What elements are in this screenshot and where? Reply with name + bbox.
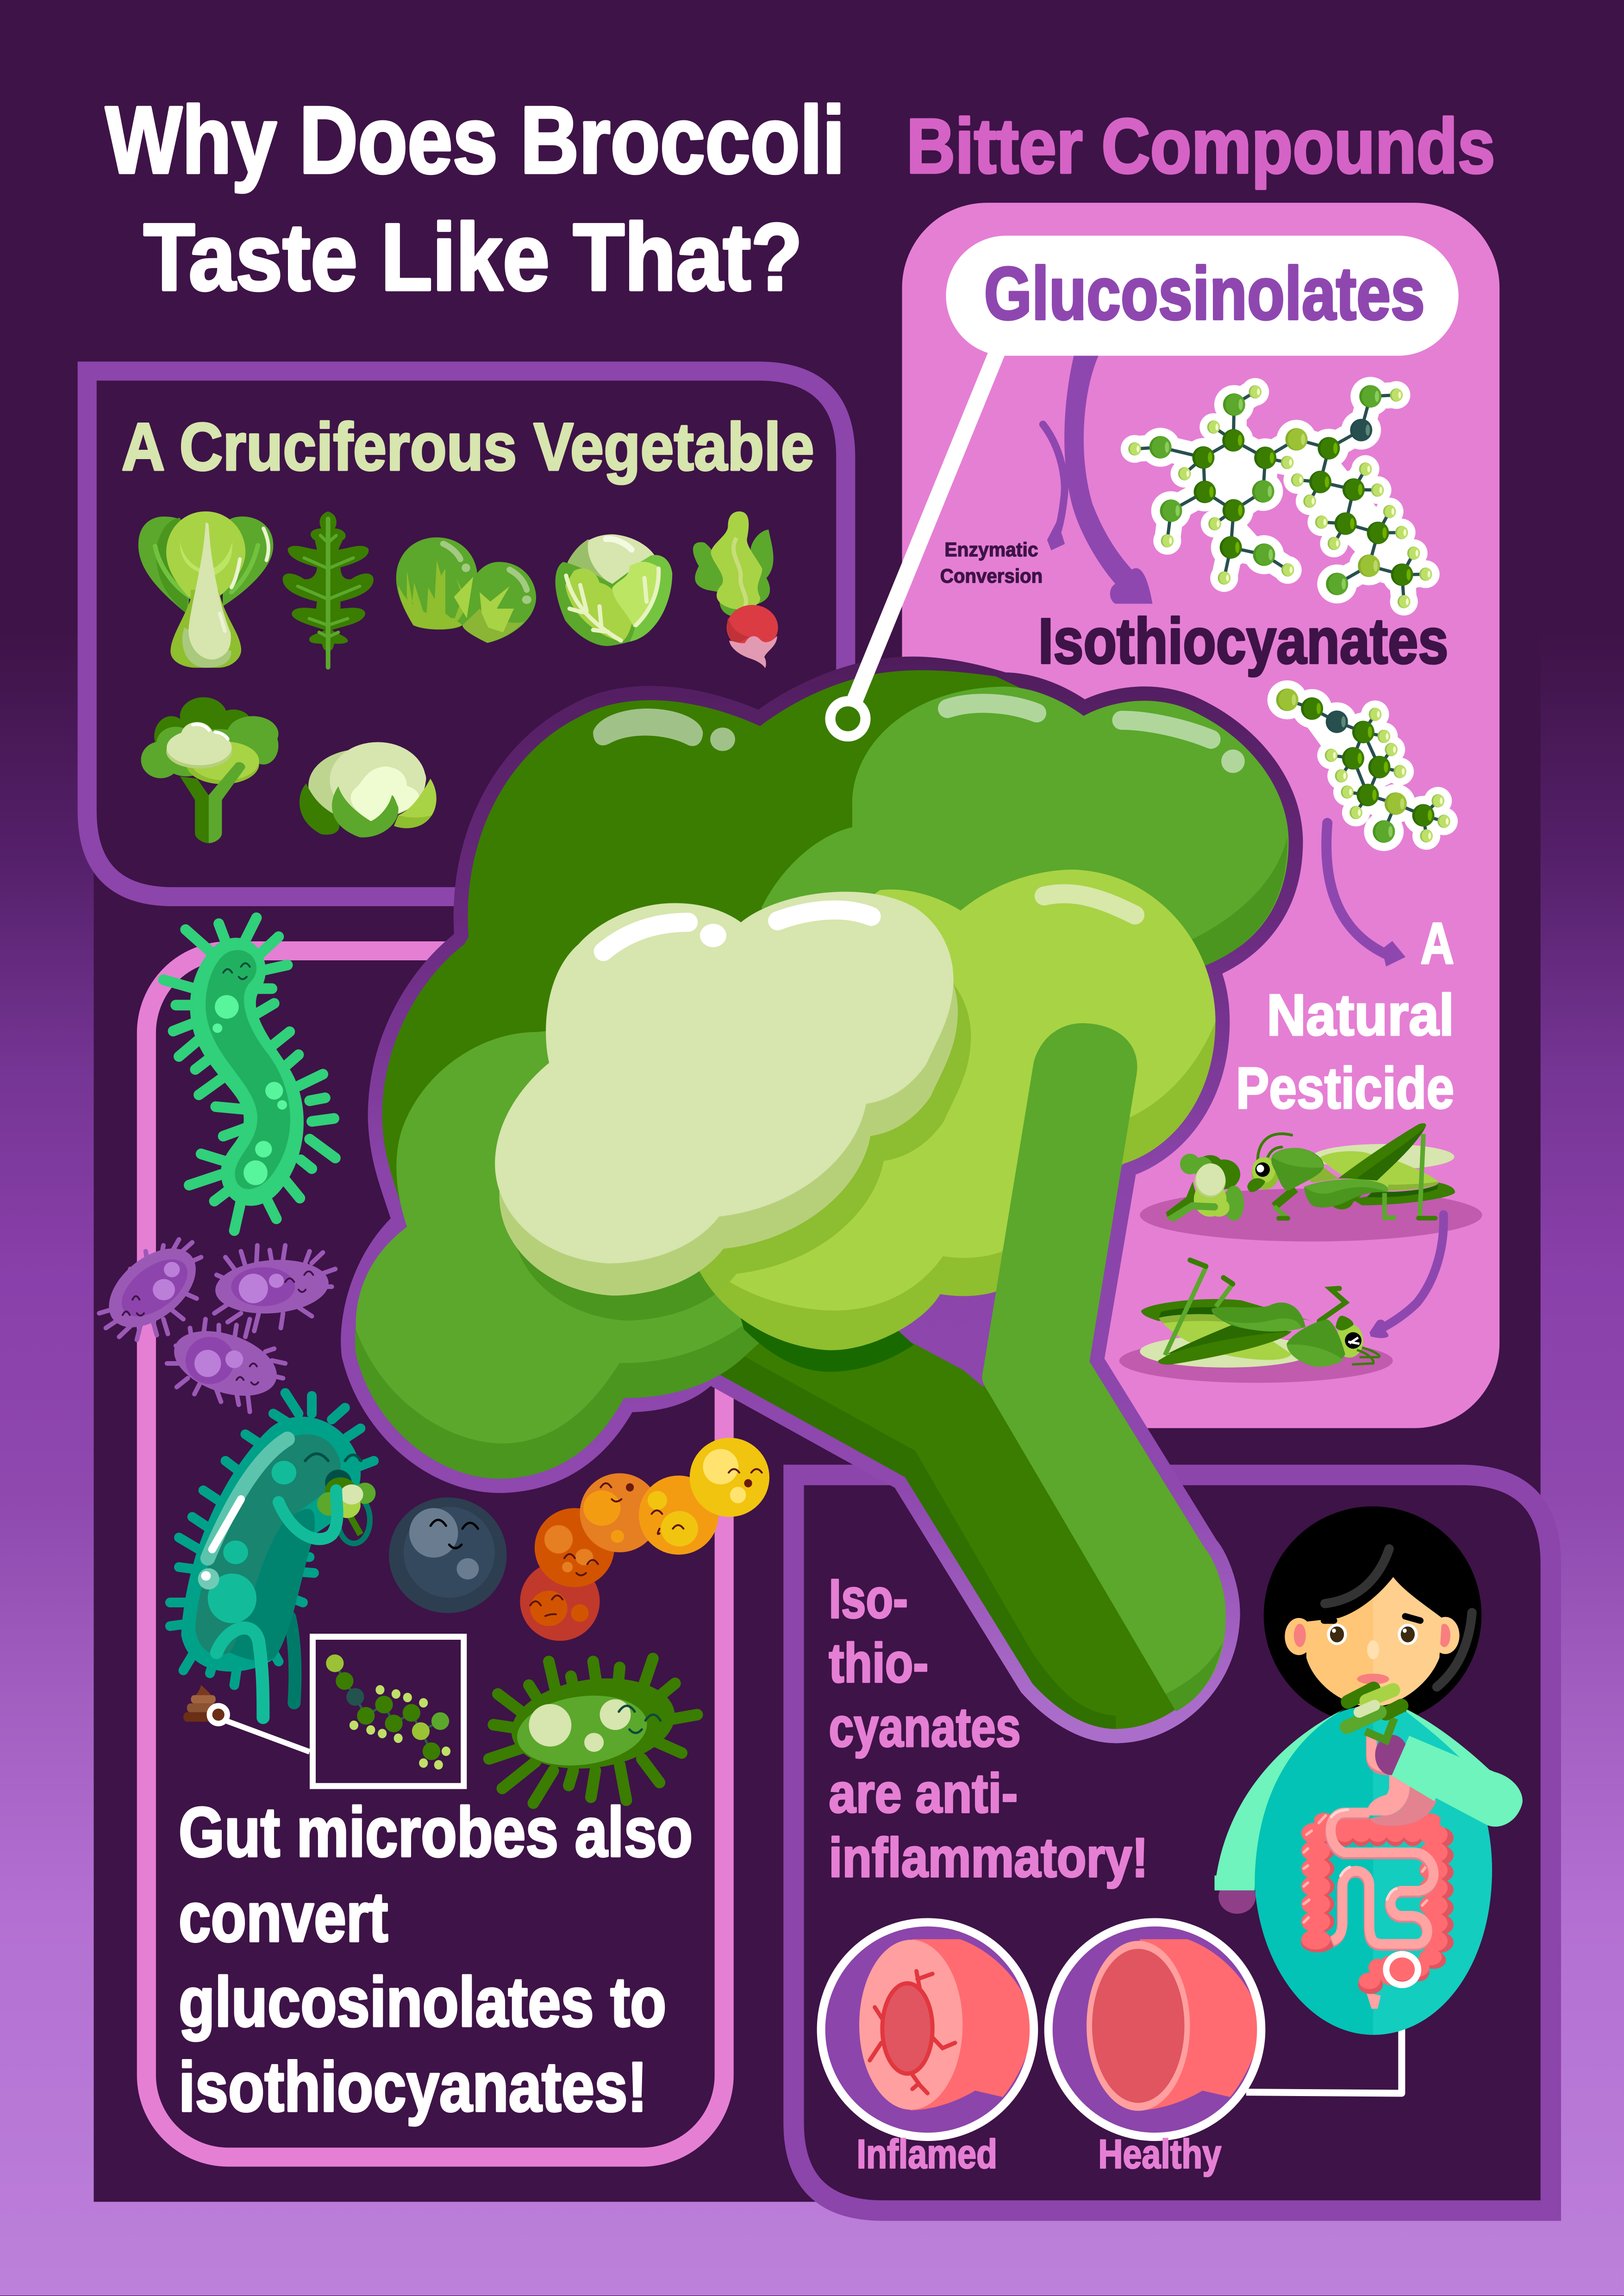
coccus: dark blue [389, 1497, 507, 1613]
text: gut microbes also convert: glucosinolates to [179, 1963, 666, 2041]
label: isothiocyanates: Isothiocyanates [1038, 605, 1448, 677]
text: isothiocyanates are anti-inflammatory: are anti- [829, 1762, 1018, 1824]
panel: cruciferous vegetables [87, 371, 846, 896]
text: isothiocyanates are anti-inflammatory: Iso- [829, 1568, 908, 1630]
text: gut microbes also convert: convert [179, 1878, 388, 1956]
icon: radish [693, 511, 778, 668]
icon: broccoli held at mouth [1347, 1689, 1401, 1740]
large intestine [1301, 1813, 1454, 1981]
title [106, 87, 845, 310]
panel: anti-inflammatory [793, 1475, 1551, 2210]
arm, hand and face [1285, 1577, 1523, 1827]
label: a natural pesticide: Natural [1267, 982, 1454, 1047]
bacteria: purple trio [99, 1232, 335, 1412]
ring marker [831, 701, 865, 736]
molecule halo [1268, 680, 1458, 851]
text: isothiocyanates are anti-inflammatory: thio- [829, 1632, 928, 1694]
broccoli main illustration [355, 670, 1289, 1729]
panel: bitter compounds pathway [902, 203, 1499, 1428]
stem [708, 1288, 1226, 1729]
molecule: glucosinolate [1121, 377, 1440, 616]
molecule halo [1121, 377, 1440, 616]
text: gut microbes also convert: Gut microbes also [179, 1793, 693, 1872]
connector line [1246, 1968, 1402, 2093]
icon: broccoli bite [1166, 1154, 1244, 1221]
poop with marker [183, 1685, 310, 1752]
head: pale florets [495, 892, 958, 1295]
bacterium: teal eating broccoli [170, 1393, 375, 1717]
bacterium: green capsule [489, 1659, 697, 1803]
text: isothiocyanates are anti-inflammatory [829, 1568, 1148, 1889]
colon cross-sections and connector [821, 1922, 1402, 2137]
bacterium: green worm [163, 918, 335, 1231]
stem shadow crescent [732, 1288, 914, 1372]
panel: gut microbes [146, 951, 724, 2157]
upper stem [982, 1023, 1226, 1711]
icon: arugula [283, 511, 374, 667]
person eating broccoli [1214, 1506, 1523, 2035]
arrow: to dead grasshopper [1369, 1214, 1443, 1338]
label: a natural pesticide: Pesticide [1236, 1055, 1454, 1121]
text: gut microbes also convert: isothiocyanates! [179, 2048, 647, 2126]
tip shade [1166, 1643, 1223, 1711]
head: back dark lobes [382, 670, 1113, 1318]
rectum and appendix [1358, 1954, 1418, 2009]
heading: a cruciferous vegetable: A Cruciferous Vegetable [122, 409, 814, 484]
text: isothiocyanates are anti-inflammatory: inflammatory! [829, 1827, 1148, 1889]
illustration: inflamed colon [821, 1922, 1034, 2137]
label: enzymatic conversion: Enzymatic [944, 539, 1038, 561]
stomach [1368, 1774, 1437, 1826]
title: Taste Like That? [144, 204, 802, 310]
arrows: conversion [1043, 355, 1405, 966]
grasshopper: dead on its back [1119, 1214, 1443, 1383]
icon: cauliflower [300, 742, 437, 837]
pale shadow on light lobes [700, 984, 971, 1294]
microbes [99, 918, 769, 1803]
icon: broccoli held [317, 1477, 375, 1535]
icon: brussels sprouts [396, 537, 536, 643]
icon: broccoli small [141, 697, 278, 843]
label: inflamed: Inflamed [856, 2131, 997, 2177]
heading: bitter compounds: Bitter Compounds [906, 102, 1495, 189]
illustration: healthy colon [1049, 1922, 1261, 2137]
label: healthy: Healthy [1098, 2131, 1221, 2177]
title: Why Does Broccoli [106, 87, 845, 193]
head: mid lobes [355, 687, 1289, 1479]
inset box: isothiocyanate molecule [312, 1636, 464, 1786]
digestive tract [1301, 1733, 1454, 2009]
grasshopper: eating broccoli [1140, 1123, 1482, 1242]
text: isothiocyanates are anti-inflammatory: cyanates [829, 1697, 1021, 1759]
broccoli outline [355, 671, 1289, 1729]
callout pill: glucosinolates [831, 236, 1459, 736]
molecule: isothiocyanate [1268, 680, 1458, 851]
highlights [603, 703, 1211, 952]
vegetable icons [138, 511, 778, 843]
coccus chain: red to yellow [520, 1438, 769, 1641]
small intestine [1330, 1810, 1434, 1946]
head: light lobes [700, 870, 1216, 1350]
heading: glucosinolates: Glucosinolates [984, 252, 1425, 336]
label: enzymatic conversion: Conversion [940, 565, 1043, 587]
icon: bok choy [138, 511, 273, 668]
text: gut microbes also convert [179, 1793, 693, 2126]
label: a natural pesticide: A [1420, 910, 1454, 976]
icon: cabbage [556, 534, 672, 646]
label: a natural pesticide [1236, 910, 1454, 1121]
head: pale shadow on mid lobes [512, 949, 971, 1320]
label: enzymatic conversion [940, 539, 1043, 587]
